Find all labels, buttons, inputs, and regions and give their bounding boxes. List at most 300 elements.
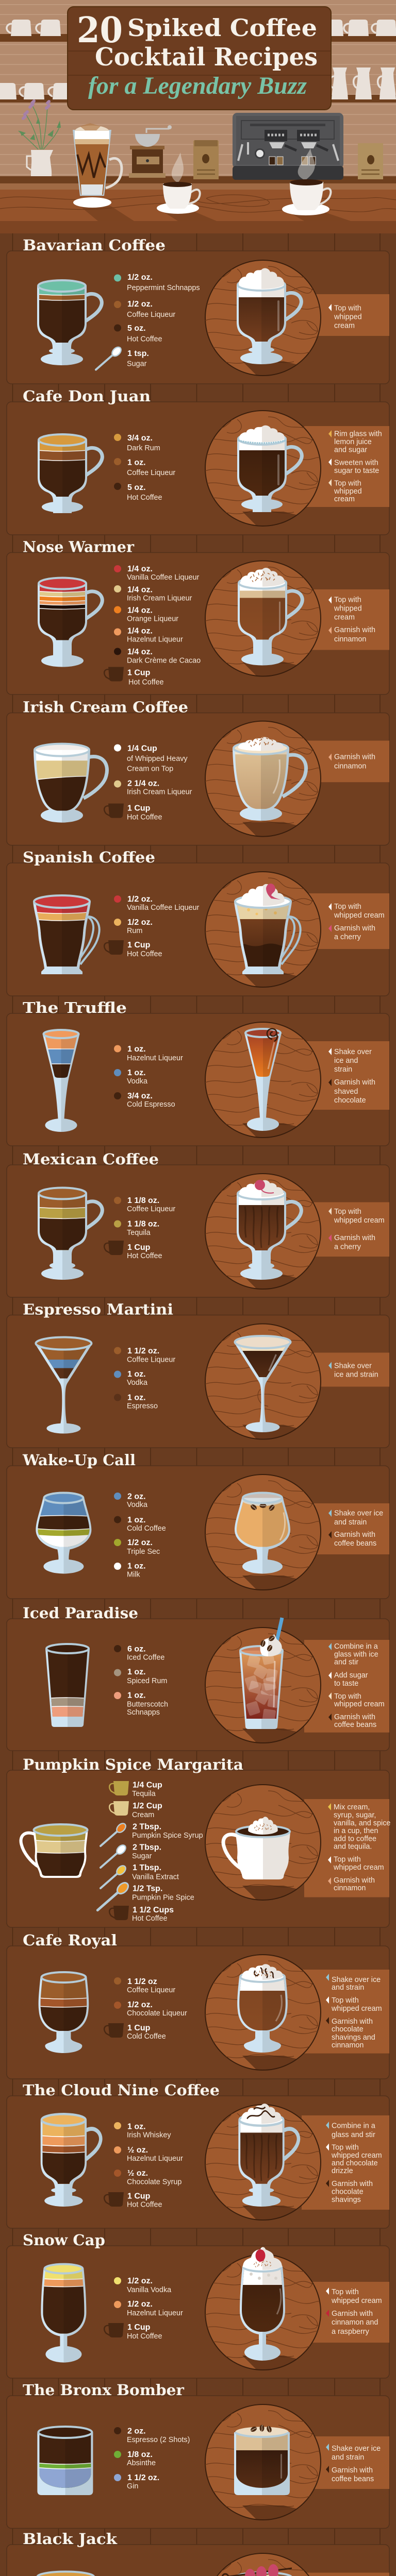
wood circle xyxy=(205,1174,321,1291)
ingredients: 1 Cup xyxy=(127,1243,151,1252)
ingredients xyxy=(104,2277,183,2341)
ingredients: 1/4 oz. xyxy=(127,648,153,656)
ingredients: Hot Coffee xyxy=(127,2332,162,2341)
heading: Mexican Coffee xyxy=(23,1150,159,1168)
finished drink xyxy=(230,1180,301,1280)
title sign: 20 xyxy=(77,10,123,51)
ingredients: Cold Espresso xyxy=(127,1100,175,1109)
ingredients: Vodka xyxy=(127,1077,147,1086)
instructions: Garnish with xyxy=(334,1234,375,1242)
ingredients xyxy=(104,1196,175,1260)
ingredients: 1 Cup xyxy=(127,2024,151,2032)
title sign xyxy=(68,7,331,110)
ingredients: 1 Cup xyxy=(127,669,151,677)
instructions: lemon juice xyxy=(334,438,372,446)
ingredients: ½ oz. xyxy=(127,2169,148,2178)
wood circle xyxy=(205,260,321,378)
icon: coffee cup with steam, left xyxy=(157,152,200,214)
ingredients: 1/2 Cup xyxy=(133,1802,162,1810)
ingredients: Sugar xyxy=(127,360,147,368)
ingredients: Hot Coffee xyxy=(127,2201,162,2209)
instructions: Shake over xyxy=(334,1048,372,1056)
ingredients: 1 oz. xyxy=(127,1393,146,1402)
layered glass xyxy=(35,2571,96,2576)
ingredients: Cold Coffee xyxy=(127,2032,166,2041)
ingredients: 1/2 oz. xyxy=(127,918,153,927)
instructions: Top with xyxy=(334,479,361,487)
instructions: Combine in a xyxy=(334,1642,378,1651)
panel: Spanish Coffee xyxy=(7,849,389,1002)
instruction banner xyxy=(304,1799,389,1897)
instructions: coffee beans xyxy=(332,2475,374,2483)
finished drink xyxy=(232,2247,293,2361)
ingredients: 3/4 oz. xyxy=(127,434,153,443)
ingredients: Irish Cream Liqueur xyxy=(127,595,192,603)
instructions: coffee beans xyxy=(334,1539,376,1548)
ingredients: Rum xyxy=(127,927,142,935)
instructions: to taste xyxy=(334,1680,358,1688)
ingredients: 1/2 oz. xyxy=(127,2277,153,2285)
layered mug xyxy=(20,1823,89,1878)
heading: Wake-Up Call xyxy=(22,1451,136,1469)
panel: Cafe Royal xyxy=(7,1931,389,2088)
instructions: cream xyxy=(334,613,355,621)
ingredients: Tequila xyxy=(132,1790,156,1798)
ingredients: Hot Coffee xyxy=(127,494,162,502)
instruction banner xyxy=(304,1353,389,1387)
instructions: cinnamon xyxy=(334,762,366,771)
ingredients: Coffee Liqueur xyxy=(127,1986,175,1994)
instructions xyxy=(328,304,362,330)
instructions: chocolate xyxy=(334,1096,366,1105)
ingredients: 2 Tbsp. xyxy=(133,1823,161,1832)
instructions xyxy=(328,753,375,771)
ingredients: 1 tsp. xyxy=(127,349,149,358)
wood circle xyxy=(205,1785,321,1902)
ingredients: 1 Cup xyxy=(127,2323,151,2332)
ingredients: 1/2 oz. xyxy=(127,895,153,904)
finished drink xyxy=(233,2104,299,2207)
instructions: and stir xyxy=(334,1658,358,1667)
instructions: and strain xyxy=(332,1984,364,1992)
wood circle xyxy=(205,2404,321,2522)
instruction banner xyxy=(302,2115,389,2210)
layered glass xyxy=(33,894,101,974)
layered glass xyxy=(41,2263,87,2363)
instructions: sugar to taste xyxy=(334,467,379,475)
finished drink xyxy=(233,2571,294,2576)
instructions xyxy=(326,1974,382,2049)
layered glass xyxy=(40,2113,103,2207)
instructions: Garnish with xyxy=(332,2180,373,2188)
instructions: shavings xyxy=(332,2196,361,2204)
ingredients: Hot Coffee xyxy=(127,950,162,958)
ingredients: 6 oz. xyxy=(127,1645,146,1654)
ingredients: 2 oz. xyxy=(127,2427,146,2436)
ingredients: 1/4 Cup xyxy=(127,744,157,753)
instructions: Top with xyxy=(334,304,361,312)
instructions: Garnish with xyxy=(334,753,375,761)
instructions: Mix cream, xyxy=(334,1803,370,1811)
layered glass xyxy=(45,1643,90,1727)
wood circle xyxy=(205,2105,321,2222)
wood circle xyxy=(205,1628,321,1745)
instructions: Sweeten with xyxy=(334,459,378,467)
instructions: Top with xyxy=(332,2143,359,2151)
ingredients: 1 oz. xyxy=(127,1045,146,1054)
ingredients: Chocolate Syrup xyxy=(127,2178,182,2187)
ingredients: Hot Coffee xyxy=(128,678,164,686)
instructions: Top with xyxy=(334,596,361,604)
ingredients xyxy=(114,1347,175,1411)
ingredients: 1/4 Cup xyxy=(133,1781,162,1790)
ingredients: Irish Cream Liqueur xyxy=(127,788,192,796)
panel: Pumpkin Spice Margarita xyxy=(7,1756,390,1934)
mug shelves with hanging cups xyxy=(0,20,396,103)
instructions: in a cup, then xyxy=(334,1827,378,1835)
wood circle xyxy=(205,2553,321,2576)
ingredients: Tequila xyxy=(127,1229,151,1237)
instructions: whipped cream xyxy=(334,911,385,920)
panel: Mexican Coffee xyxy=(7,1150,389,1299)
ingredients: ½ oz. xyxy=(127,2146,148,2155)
ingredients xyxy=(114,2427,190,2490)
instructions: Garnish with xyxy=(334,1078,375,1087)
instructions: chocolate xyxy=(332,2188,364,2196)
instruction banner xyxy=(304,1041,389,1110)
ingredients: Chocolate Liqueur xyxy=(127,2009,187,2018)
instruction banner xyxy=(304,893,389,949)
heading: Snow Cap xyxy=(23,2231,105,2249)
instructions: Top with xyxy=(332,1996,359,2005)
ingredients xyxy=(114,434,175,502)
wood circle xyxy=(205,561,321,678)
instructions: cinnamon xyxy=(334,635,366,643)
ingredients: Vodka xyxy=(127,1379,147,1387)
finished drink xyxy=(231,426,302,512)
title sign: Cocktail Recipes xyxy=(95,43,318,72)
instruction banner xyxy=(304,1640,389,1733)
ingredients xyxy=(97,1781,203,1923)
finished drink xyxy=(232,1492,293,1573)
ingredients: Cream on Top xyxy=(127,765,173,773)
ingredients: Coffee Liqueur xyxy=(127,469,175,477)
ingredients: Hot Coffee xyxy=(127,1252,162,1260)
instructions: ice and strain xyxy=(334,1370,378,1379)
ingredients: Pumpkin Pie Spice xyxy=(132,1894,194,1902)
ingredients: Cream xyxy=(132,1811,154,1819)
ingredients: of Whipped Heavy xyxy=(127,755,188,763)
finished drink xyxy=(237,1964,288,2053)
instructions xyxy=(326,2444,381,2483)
icon: coffee grinder xyxy=(129,125,172,178)
instructions: Shake over xyxy=(334,1362,372,1370)
instructions: whipped cream xyxy=(334,1700,385,1708)
instructions: cream xyxy=(334,495,355,503)
icon: tall latte glass xyxy=(73,123,122,208)
ingredients xyxy=(104,744,192,822)
ingredients xyxy=(104,1977,187,2041)
wood circle xyxy=(205,1022,321,1140)
heading: Nose Warmer xyxy=(23,538,135,555)
panel: The Bronx Bomber xyxy=(7,2381,389,2529)
ingredients: 1 Cup xyxy=(127,941,151,950)
ingredients: 2 Tbsp. xyxy=(133,1843,161,1852)
instructions: a raspberry xyxy=(332,2328,370,2336)
ingredients: Coffee Liqueur xyxy=(127,1205,175,1213)
heading: Bavarian Coffee xyxy=(23,236,166,254)
ingredients: 1 1/2 oz xyxy=(127,1977,157,1986)
instructions: and tequila. xyxy=(334,1843,372,1851)
instructions: Top with xyxy=(334,903,361,911)
finished drink xyxy=(239,1617,284,1729)
ingredients: 1 Tbsp. xyxy=(133,1863,161,1872)
panel: Black Jack xyxy=(7,2530,389,2576)
layered glass xyxy=(38,1187,104,1280)
wood circle xyxy=(205,1955,321,2072)
instruction banner xyxy=(304,741,389,782)
instructions: strain xyxy=(334,1065,352,1074)
finished drink xyxy=(232,568,302,666)
instructions: cream xyxy=(334,321,355,330)
ingredients: Gin xyxy=(127,2482,138,2490)
wood circle xyxy=(205,411,321,528)
layered glass xyxy=(42,1029,79,1132)
heading: Irish Cream Coffee xyxy=(23,699,188,716)
finished drink xyxy=(230,736,306,821)
instructions xyxy=(328,430,382,503)
finished drink xyxy=(231,2425,293,2498)
instructions: whipped xyxy=(334,605,362,613)
ingredients: 1 oz. xyxy=(127,459,146,467)
layered glass xyxy=(37,279,104,365)
wood circle xyxy=(205,2255,321,2372)
ingredients: Iced Coffee xyxy=(127,1654,164,1662)
instruction banner xyxy=(302,1970,389,2054)
instructions: whipped cream xyxy=(331,2151,382,2160)
instructions: drizzle xyxy=(332,2167,353,2175)
instructions: whipped xyxy=(334,313,362,321)
instruction banner xyxy=(304,294,389,336)
ingredients: Vanilla Vodka xyxy=(127,2286,171,2294)
ingredients: Spiced Rum xyxy=(127,1677,167,1685)
panel: Espresso Martini xyxy=(7,1300,389,1448)
layered glass xyxy=(38,577,104,667)
ingredients xyxy=(114,1645,168,1717)
instructions: chocolate xyxy=(332,2025,364,2033)
instructions: Shake over ice xyxy=(332,2445,381,2453)
ingredients: Hazelnut Liqueur xyxy=(127,2309,183,2317)
heading: Iced Paradise xyxy=(23,1604,138,1622)
ingredients: Vanilla Coffee Liqueur xyxy=(127,904,199,912)
ingredients: 3/4 oz. xyxy=(127,1092,153,1100)
instructions xyxy=(328,1048,375,1105)
instructions: Rim glass with xyxy=(334,430,382,438)
ingredients: 1 oz. xyxy=(127,1069,146,1077)
icon: coffee cup with steam, right xyxy=(282,148,331,215)
ingredients: Milk xyxy=(127,1571,140,1579)
title sign: Spiked Coffee xyxy=(127,14,317,42)
heading: Cafe Royal xyxy=(23,1931,117,1949)
ingredients: 1/4 oz. xyxy=(127,606,153,615)
ingredients: 1 oz. xyxy=(127,1668,146,1676)
finished drink xyxy=(230,268,301,364)
instructions xyxy=(328,903,385,941)
heading: Pumpkin Spice Margarita xyxy=(23,1756,243,1773)
heading: The Truffle xyxy=(23,999,127,1016)
ingredients: Pumpkin Spice Syrup xyxy=(132,1832,203,1840)
layered glass xyxy=(38,433,104,513)
ingredients: Hazelnut Liqueur xyxy=(127,2155,183,2163)
ingredients: 1/2 oz. xyxy=(127,300,153,309)
ingredients: Hot Coffee xyxy=(127,814,162,822)
ingredients: Sugar xyxy=(132,1852,152,1860)
ingredients: 2 1/4 oz. xyxy=(127,779,159,788)
instructions: cinnamon and xyxy=(332,2318,378,2327)
instructions: a cherry xyxy=(334,1243,361,1251)
instructions: Garnish with xyxy=(334,1531,375,1539)
panel: Cafe Don Juan xyxy=(7,387,389,541)
ingredients: Butterscotch xyxy=(127,1701,168,1709)
ingredients: 1 oz. xyxy=(127,1370,146,1379)
instructions xyxy=(328,1803,390,1892)
ingredients: Vodka xyxy=(127,1501,147,1509)
instructions: whipped xyxy=(334,487,362,496)
ingredients: Coffee Liqueur xyxy=(127,1356,175,1364)
ingredients: Coffee Liqueur xyxy=(127,311,175,319)
panel: The Cloud Nine Coffee xyxy=(7,2081,389,2228)
ingredients: Triple Sec xyxy=(127,1548,160,1556)
icon: espresso machine xyxy=(233,113,343,180)
ingredients: 1 Cup xyxy=(127,804,151,813)
layered glass xyxy=(38,1971,89,2053)
ingredients: 1/4 oz. xyxy=(127,565,153,573)
instructions: shaved xyxy=(334,1088,358,1096)
instruction banner xyxy=(304,1202,389,1257)
instructions: and sugar xyxy=(334,446,367,454)
instructions: a cherry xyxy=(334,933,361,941)
ingredients xyxy=(104,2122,183,2209)
heading: Cafe Don Juan xyxy=(23,387,151,405)
panel: Snow Cap xyxy=(7,2231,389,2378)
ingredients: Vanilla Extract xyxy=(132,1873,179,1882)
ingredients: Espresso xyxy=(127,1402,158,1411)
instructions: Garnish with xyxy=(332,2466,373,2475)
instruction banner xyxy=(304,589,389,650)
ingredients: Orange Liqueur xyxy=(127,615,178,623)
instructions: Shake over ice xyxy=(334,1510,383,1518)
instructions: syrup, sugar, xyxy=(334,1811,376,1820)
ingredients: Hazelnut Liqueur xyxy=(127,1054,183,1062)
ingredients: 1 oz. xyxy=(127,1691,146,1700)
heading: Espresso Martini xyxy=(23,1300,173,1318)
instructions: glass with ice xyxy=(334,1651,378,1659)
instruction banner xyxy=(304,2282,389,2343)
ingredients xyxy=(104,565,201,686)
ingredients xyxy=(114,1492,166,1579)
layered glass xyxy=(32,1337,94,1433)
panel: Wake-Up Call xyxy=(6,1454,390,1599)
ingredients: 1 oz. xyxy=(127,2123,146,2131)
instructions xyxy=(328,1362,378,1379)
ingredients: 5 oz. xyxy=(127,483,146,492)
instructions: cinnamon xyxy=(332,2041,364,2049)
ingredients: Dark Rum xyxy=(127,444,160,452)
instructions: Top with xyxy=(334,1856,361,1864)
ingredients: 5 oz. xyxy=(127,324,146,333)
ingredients: Hot Coffee xyxy=(132,1914,168,1923)
ingredients: Peppermint Schnapps xyxy=(127,284,200,292)
instructions: whipped cream xyxy=(331,2005,382,2013)
panel: Bavarian Coffee xyxy=(7,236,389,384)
ingredients: Hot Coffee xyxy=(127,335,162,344)
ingredients: 1/2 Tsp. xyxy=(133,1885,162,1893)
instructions: Combine in a xyxy=(332,2122,375,2130)
ingredients: 1 1/2 oz. xyxy=(127,2473,159,2482)
instruction banner xyxy=(304,2436,389,2489)
instruction banner xyxy=(304,1503,389,1554)
instructions: cinnamon xyxy=(334,1884,366,1892)
instructions: Garnish with xyxy=(332,2310,373,2318)
panel: Nose Warmer xyxy=(7,538,389,694)
heading: The Cloud Nine Coffee xyxy=(23,2081,220,2099)
finished drink xyxy=(232,884,301,976)
instructions: Top with xyxy=(334,1208,361,1216)
instructions xyxy=(328,596,375,643)
ingredients: 1/8 oz. xyxy=(127,2450,153,2459)
ingredients: 1/4 oz. xyxy=(127,626,153,636)
ingredients: 2 oz. xyxy=(127,1492,146,1501)
ingredients: 1 oz. xyxy=(127,1562,146,1571)
instructions: shavings and xyxy=(332,2033,375,2042)
ingredients: 1 1/2 Cups xyxy=(133,1906,174,1914)
instructions: and strain xyxy=(332,2453,364,2462)
ingredients xyxy=(96,273,200,370)
instructions: and strain xyxy=(334,1518,367,1527)
instructions: Garnish with xyxy=(334,1876,375,1885)
layered glass xyxy=(34,2426,96,2519)
layered glass xyxy=(34,743,109,823)
instructions: whipped cream xyxy=(331,2297,382,2305)
heading: The Bronx Bomber xyxy=(23,2381,185,2399)
ingredients: Vanilla Coffee Liqueur xyxy=(127,573,199,582)
ingredients: 1/2 oz. xyxy=(127,2001,153,2009)
title sign: for a Legendary Buzz xyxy=(88,72,307,99)
instructions: Shake over ice xyxy=(332,1976,381,1984)
instructions: Garnish with xyxy=(334,1713,375,1721)
panel: Irish Cream Coffee xyxy=(7,699,389,859)
ingredients: Espresso (2 Shots) xyxy=(127,2436,190,2444)
instructions: ice and xyxy=(334,1057,358,1065)
instructions: Top with xyxy=(334,1692,361,1701)
instructions: glass and stir xyxy=(332,2131,375,2139)
panel: The Truffle xyxy=(7,999,389,1146)
layered glass xyxy=(36,1492,92,1573)
ingredients: Cold Coffee xyxy=(127,1524,166,1533)
instruction banner xyxy=(304,2573,389,2576)
icon: flower jug xyxy=(19,101,61,176)
ingredients: 1/2 oz. xyxy=(127,273,153,282)
instructions: vanilla, and spice xyxy=(334,1819,390,1827)
ingredients xyxy=(114,1045,183,1109)
icon: coffee bags xyxy=(193,140,383,179)
instructions: whipped cream xyxy=(333,1863,384,1872)
instructions: Add sugar xyxy=(334,1671,368,1680)
ingredients: Irish Whiskey xyxy=(127,2131,171,2140)
ingredients: Schnapps xyxy=(127,1708,160,1717)
ingredients: Absinthe xyxy=(127,2459,156,2467)
instructions: and chocolate xyxy=(332,2159,378,2167)
